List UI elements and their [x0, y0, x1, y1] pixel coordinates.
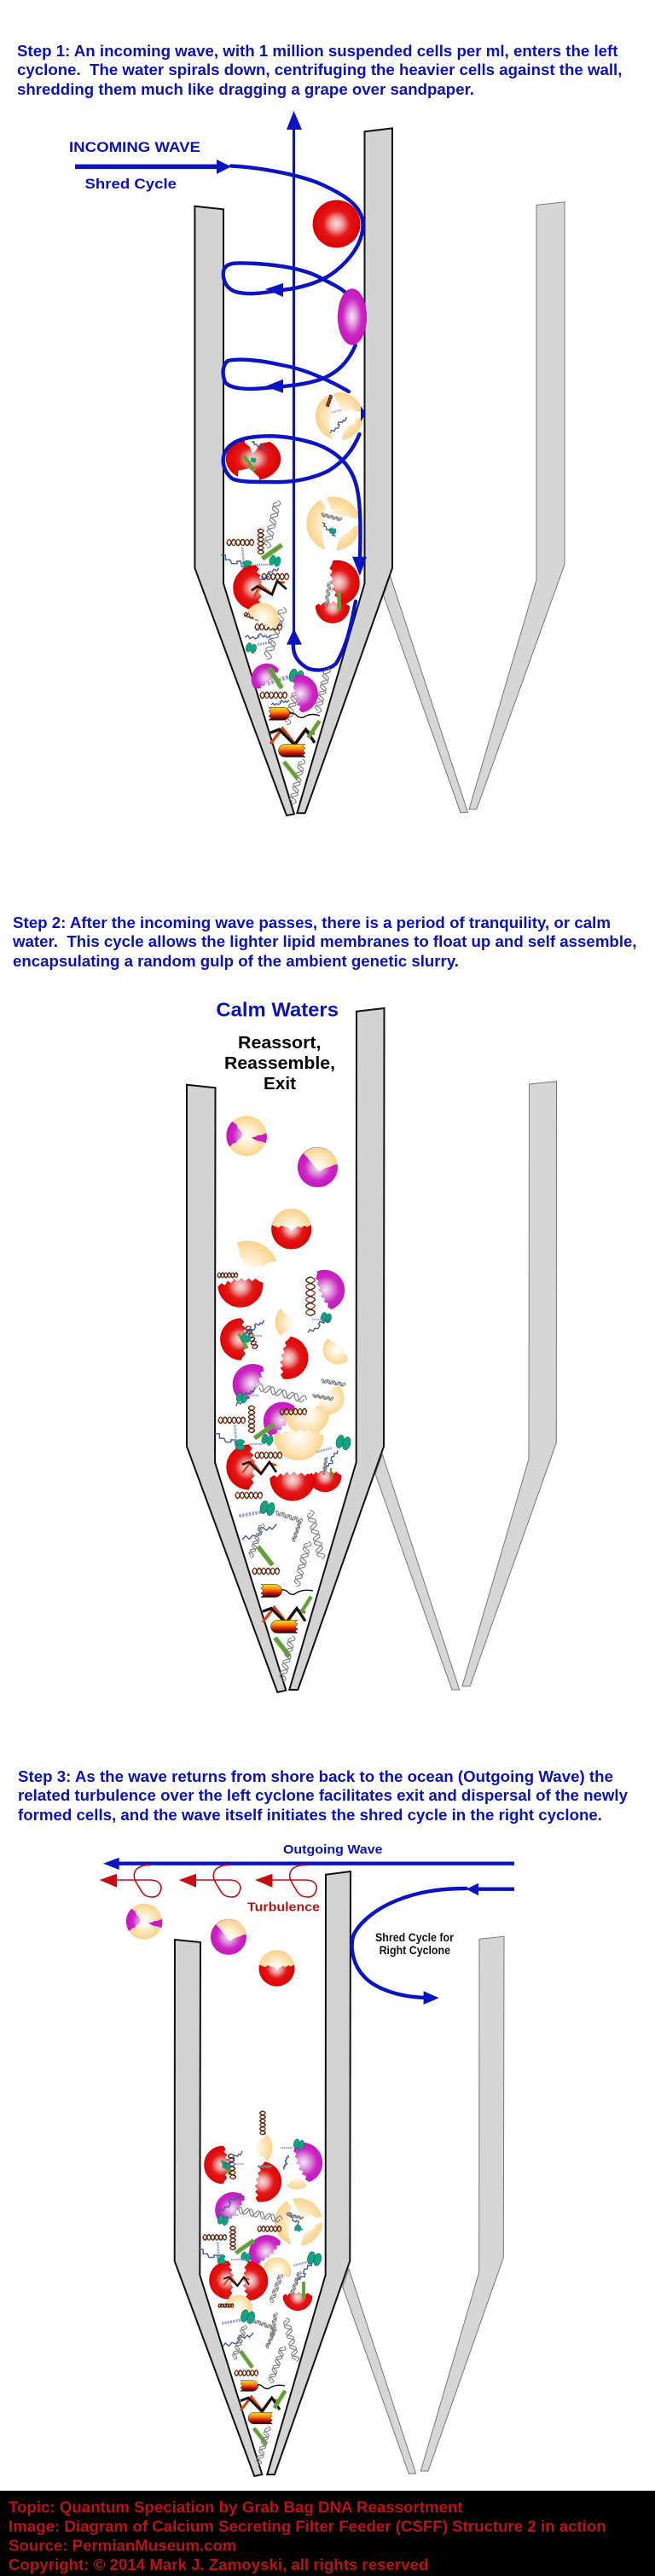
footer background — [0, 2491, 655, 2576]
bacteria and DNA in cone tip — [269, 707, 322, 780]
arrow: outgoing wave — [103, 1858, 514, 1870]
label: turbulence: Turbulence — [247, 1900, 320, 1915]
label: outgoing wave: Outgoing Wave — [283, 1842, 382, 1857]
reassembled cell: yellow and magenta — [226, 1116, 267, 1156]
arrow: upward flow — [287, 111, 302, 645]
footer credits: Copyright: © 2014 Mark J. Zamoyski, all rights reserved — [9, 2556, 428, 2573]
label: shred cycle for right cyclone: Shred Cycle for — [375, 1930, 454, 1944]
membrane fragments — [217, 1234, 351, 1501]
panel: step 3 — [18, 1767, 629, 2476]
left cyclone walls — [175, 1871, 351, 2476]
footer credits: Image: Diagram of Calcium Secreting Filter Feeder (CSFF) Structure 2 in action — [9, 2517, 606, 2535]
left cyclone walls — [194, 128, 392, 815]
cell fragments — [233, 557, 363, 713]
intact red cell — [313, 200, 361, 247]
intact magenta cell — [338, 288, 367, 345]
label: reassort, reassemble, exit: Reassemble, — [224, 1054, 335, 1073]
genetic slurry — [199, 2111, 322, 2465]
label: incoming wave: INCOMING WAVE — [69, 140, 200, 155]
genetic slurry — [215, 1273, 352, 1682]
right cyclone walls — [343, 1936, 504, 2474]
label: reassort, reassemble, exit: Exit — [264, 1075, 296, 1094]
step 3 description: related turbulence over the left cyclone facilitates exit and dispersal of the newly — [18, 1786, 629, 1804]
reassembled cell: magenta — [298, 1147, 338, 1187]
label: shred cycle: Shred Cycle — [85, 177, 177, 192]
shredded yellow cell — [316, 392, 363, 440]
label: shred cycle for right cyclone: Right Cyclone — [380, 1943, 450, 1957]
arrow: incoming wave spiral — [75, 160, 367, 670]
right cyclone walls — [384, 202, 565, 813]
exiting cell: yellow and magenta — [126, 1904, 162, 1940]
reassembled cell: red — [271, 1209, 311, 1250]
shredded yellow cell with DNA — [306, 496, 361, 551]
panel: step 2 — [12, 914, 637, 1692]
step 3 description: formed cells, and the wave itself initiates the shred cycle in the right cyclone. — [18, 1806, 602, 1824]
right cyclone walls — [375, 1082, 556, 1690]
step 2 description: encapsulating a random gulp of the ambient genetic slurry. — [13, 952, 459, 970]
genetic debris — [221, 499, 331, 804]
heading: calm waters: Calm Waters — [216, 999, 339, 1021]
label: reassort, reassemble, exit: Reassort, — [238, 1034, 321, 1053]
exiting cell: red — [259, 1950, 295, 1987]
arrows: turbulence eddies — [100, 1865, 316, 1897]
footer — [0, 2491, 655, 2576]
panel: step 1 — [17, 42, 622, 815]
exiting cell: magenta — [211, 1919, 246, 1955]
step 3 description: Step 3: As the wave returns from shore back to the ocean (Outgoing Wave) the — [18, 1767, 613, 1785]
step 2 description: water. This cycle allows the lighter lipid membranes to float up and self assemble, — [12, 932, 637, 950]
step 2 description: Step 2: After the incoming wave passes, there is a period of tranquility, or calm — [13, 914, 611, 931]
left cyclone walls — [187, 1008, 384, 1692]
step 1 description: cyclone. The water spirals down, centrifuging the heavier cells against the wall, — [17, 61, 622, 78]
membrane fragments — [204, 2134, 328, 2318]
step 1 description: shredding them much like dragging a grape over sandpaper. — [17, 80, 474, 98]
shredded red cell — [226, 432, 281, 484]
footer credits: Topic: Quantum Speciation by Grab Bag DNA Reassortment — [9, 2498, 463, 2516]
footer credits: Source: PermianMuseum.com — [9, 2537, 237, 2555]
arrow: shred cycle for right cyclone — [352, 1883, 514, 2005]
step 1 description: Step 1: An incoming wave, with 1 million suspended cells per ml, enters the left — [17, 42, 617, 60]
